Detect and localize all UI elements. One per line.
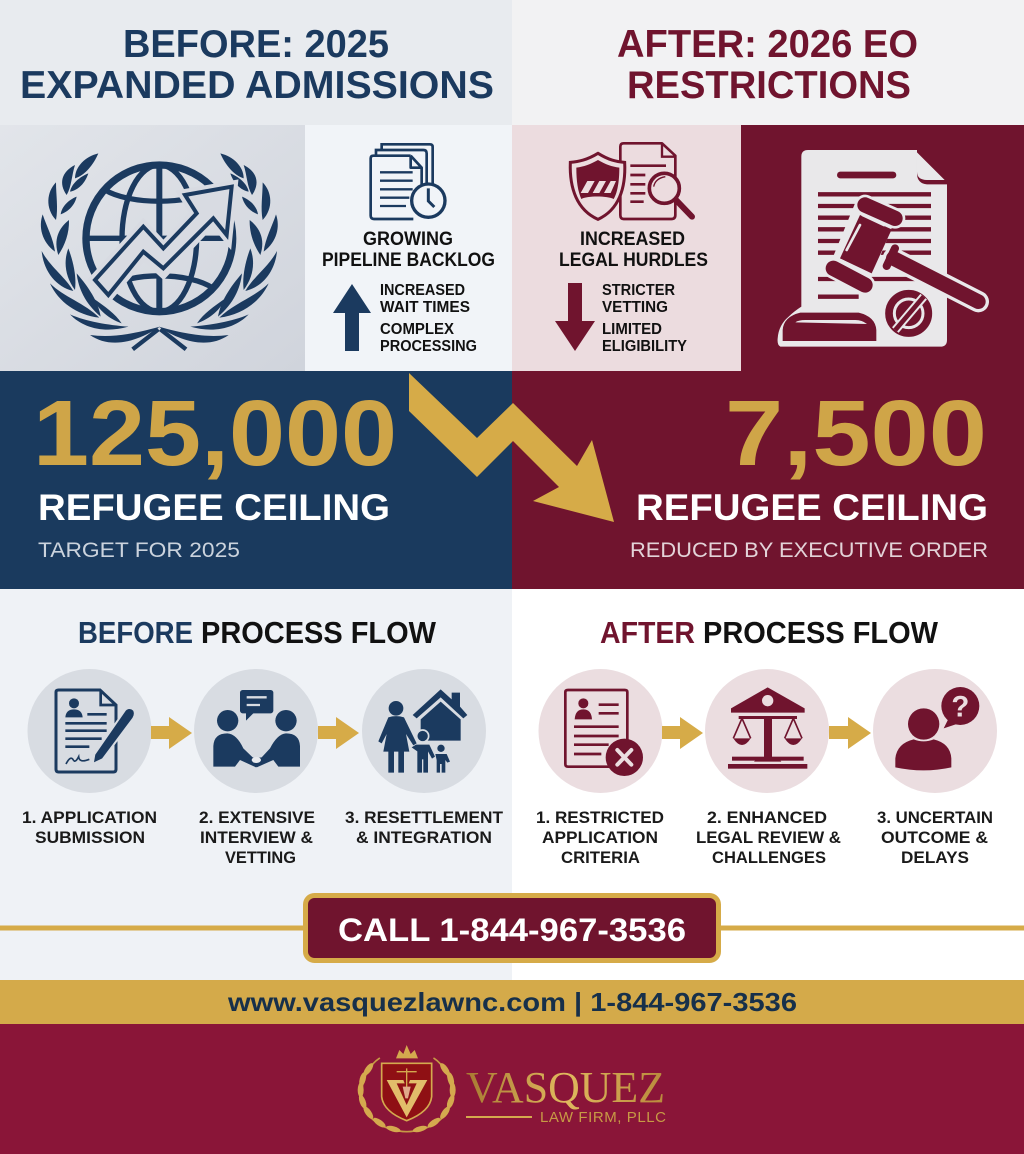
footer	[0, 1024, 1024, 1154]
icon: gavel	[833, 205, 978, 302]
heading: growing pipeline backlog: GROWING	[363, 229, 453, 250]
arrow: step 1 to 2	[151, 717, 192, 749]
heading: after process flow: PROCESS FLOW	[703, 616, 938, 650]
panel: growing pipeline backlog	[305, 125, 512, 371]
arrow: step 2 to 3	[318, 717, 359, 749]
label: step 2: INTERVIEW &	[200, 828, 313, 847]
arrow: gold downward zigzag	[409, 373, 614, 522]
label: step 1: SUBMISSION	[35, 828, 145, 847]
icon: prohibition sign	[885, 289, 933, 337]
text: backlog effects: PROCESSING	[380, 338, 477, 355]
title: after: RESTRICTIONS	[627, 64, 911, 107]
arrow: step 2 to 3	[829, 717, 871, 749]
wordmark: vasquez: VASQUEZ	[466, 1063, 665, 1112]
call to action: CALL 1-844-967-3536	[338, 912, 686, 948]
arrow: step 1 to 2	[662, 717, 703, 749]
icon: family and house	[378, 689, 467, 773]
heading: before process flow: BEFORE	[78, 616, 193, 650]
heading: after process flow: AFTER	[600, 616, 695, 650]
label: step 1: 1. APPLICATION	[22, 808, 157, 827]
number: 125,000: 125,000	[33, 381, 397, 485]
icon: globe with rising arrow	[86, 165, 233, 312]
heading: after process flow	[600, 616, 938, 650]
icon: document stack with clock	[371, 144, 445, 219]
text: hurdle effects: ELIGIBILITY	[602, 338, 688, 355]
heading: growing pipeline backlog: PIPELINE BACKLOG	[322, 250, 495, 271]
label: step 3	[345, 808, 504, 847]
icon: down arrow	[555, 283, 595, 351]
label: step 2: CHALLENGES	[712, 848, 826, 867]
call to action	[0, 896, 1024, 960]
label: step 1: 1. RESTRICTED	[536, 808, 664, 827]
label: step 3: 3. RESETTLEMENT	[345, 808, 504, 827]
heading: before process flow	[78, 616, 436, 650]
label: step 1	[536, 808, 664, 867]
step: application submission	[22, 669, 157, 847]
label: step 1: APPLICATION	[542, 828, 658, 847]
heading: before process flow: PROCESS FLOW	[201, 616, 436, 650]
step: extensive interview and vetting	[194, 669, 318, 867]
title: before	[20, 23, 494, 107]
label: step 1	[22, 808, 157, 847]
label: refugee ceiling: REFUGEE CEILING	[38, 487, 390, 528]
label: step 2: LEGAL REVIEW &	[696, 828, 841, 847]
panel: globe emblem	[0, 125, 305, 371]
label: step 3	[877, 808, 993, 867]
label: step 2	[696, 808, 841, 867]
heading: increased legal hurdles: INCREASED	[580, 229, 685, 250]
step: uncertain outcome	[873, 669, 997, 867]
title: before: BEFORE: 2025	[123, 23, 389, 66]
icon: person with question bubble	[895, 687, 979, 770]
icon: crest	[357, 1045, 456, 1133]
icon: signed application	[56, 690, 135, 772]
label: step 3: 3. UNCERTAIN	[877, 808, 993, 827]
icon: application with x mark	[565, 690, 643, 776]
step: restricted application criteria	[536, 669, 664, 867]
label: step 2: 2. EXTENSIVE	[199, 808, 315, 827]
number: 7,500: 7,500	[725, 381, 987, 485]
icon: document and gavel base	[778, 150, 947, 347]
contact bar: www.vasquezlawnc.com | 1-844-967-3536	[227, 987, 797, 1017]
step: resettlement and integration	[345, 669, 504, 847]
label: step 1: CRITERIA	[561, 848, 640, 867]
label: step 2: 2. ENHANCED	[707, 808, 827, 827]
heading: increased legal hurdles	[559, 229, 708, 271]
label: refugee ceiling: REFUGEE CEILING	[636, 487, 988, 528]
wordmark: law firm: LAW FIRM, PLLC	[540, 1109, 666, 1126]
text: hurdle effects	[602, 282, 688, 355]
contact bar	[0, 980, 1024, 1024]
icon: up arrow	[333, 284, 371, 351]
icon: wreath	[41, 153, 278, 349]
text: backlog effects	[380, 282, 477, 355]
text: backlog effects: INCREASED	[380, 282, 465, 299]
heading: increased legal hurdles: LEGAL HURDLES	[559, 250, 708, 271]
label: step 3: DELAYS	[901, 848, 969, 867]
heading: growing pipeline backlog	[322, 229, 495, 271]
sublabel: reduced by executive order: REDUCED BY EXECUTIVE ORDER	[630, 539, 988, 562]
label: step 3: & INTEGRATION	[356, 828, 492, 847]
text: hurdle effects: STRICTER	[602, 282, 675, 299]
text: hurdle effects: VETTING	[602, 299, 668, 316]
title: after	[617, 23, 918, 107]
title: before: EXPANDED ADMISSIONS	[20, 64, 494, 107]
text: hurdle effects: LIMITED	[602, 321, 662, 338]
sublabel: target for 2025: TARGET FOR 2025	[38, 539, 240, 562]
title: after: AFTER: 2026 EO	[617, 23, 918, 66]
text: backlog effects: WAIT TIMES	[380, 299, 470, 316]
text: backlog effects: COMPLEX	[380, 321, 455, 338]
label: step 3: OUTCOME &	[881, 828, 988, 847]
icon: person with question bubble: ?	[951, 691, 969, 724]
icon: handshake with speech bubble	[213, 690, 300, 767]
label: step 2	[199, 808, 315, 867]
icon: shield and document with magnifier	[570, 143, 692, 219]
panel: before refugee ceiling	[0, 371, 512, 589]
icon: courthouse with scales	[728, 687, 807, 769]
panel: gavel on document	[741, 125, 1024, 371]
logo: vasquez law firm	[357, 1045, 666, 1133]
label: step 2: VETTING	[225, 848, 296, 867]
panel: increased legal hurdles	[512, 125, 741, 371]
panel: after refugee ceiling	[512, 371, 1024, 589]
step: enhanced legal review	[696, 669, 841, 867]
